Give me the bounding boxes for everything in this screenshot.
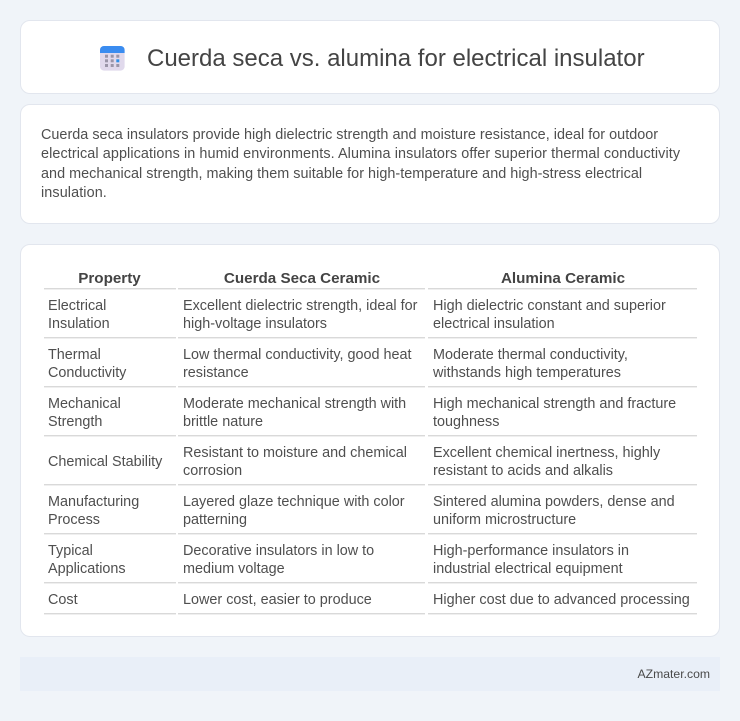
row: typical applications: medium voltage [183, 561, 285, 577]
row: thermal conductivity: Moderate thermal conductivity, [433, 347, 628, 363]
row: chemical stability: Resistant to moisture and chemical [183, 445, 407, 461]
row: typical applications: Applications [48, 561, 126, 577]
panel: intro text [20, 104, 720, 224]
row: typical applications [48, 543, 629, 577]
row: thermal conductivity: Thermal [48, 347, 101, 363]
row: cost: Lower cost, easier to produce [183, 592, 372, 608]
footer bar [20, 657, 720, 691]
row: mechanical strength: Moderate mechanical strength with [183, 396, 406, 412]
row: cost: Cost [48, 592, 78, 608]
row: chemical stability: corrosion [183, 463, 242, 479]
row: mechanical strength: Mechanical [48, 396, 121, 412]
row: manufacturing process: Layered glaze technique with color [183, 494, 405, 510]
row: cost [48, 592, 690, 608]
panel: title card [20, 20, 720, 94]
text: intro line 4: insulation. [41, 185, 107, 201]
row: mechanical strength: High mechanical strength and fracture [433, 396, 676, 412]
row: typical applications: High-performance insulators in [433, 543, 629, 559]
row: manufacturing process: Manufacturing [48, 494, 139, 510]
row: electrical insulation: Excellent dielectric strength, ideal for [183, 298, 417, 314]
row: mechanical strength: Strength [48, 414, 102, 430]
row: mechanical strength [48, 396, 676, 430]
row: manufacturing process [48, 494, 675, 528]
panel: comparison table [20, 244, 720, 637]
text: intro line 2: electrical applications in humid environments. Alumina insulators offer superior thermal conductivity [41, 146, 680, 162]
title: Cuerda seca vs. alumina for electrical insulator [147, 45, 645, 72]
row: thermal conductivity: withstands high temperatures [433, 365, 621, 381]
row: typical applications: Decorative insulators in low to [183, 543, 374, 559]
row: electrical insulation: electrical insulation [433, 316, 555, 332]
row: chemical stability: Chemical Stability [48, 454, 162, 470]
row: electrical insulation [48, 298, 666, 332]
text: intro line 1: Cuerda seca insulators provide high dielectric strength and moisture resistance, ideal for outdoor [41, 127, 658, 143]
table header [78, 270, 625, 287]
row: chemical stability [48, 445, 660, 479]
row: typical applications: industrial electrical equipment [433, 561, 623, 577]
row: thermal conductivity: Conductivity [48, 365, 126, 381]
row: electrical insulation: Electrical [48, 298, 106, 314]
row: chemical stability: Excellent chemical inertness, highly [433, 445, 660, 461]
row: mechanical strength: toughness [433, 414, 499, 430]
row: manufacturing process: Process [48, 512, 100, 528]
row: mechanical strength: brittle nature [183, 414, 263, 430]
row: electrical insulation: Insulation [48, 316, 110, 332]
row: manufacturing process: uniform microstructure [433, 512, 576, 528]
row: typical applications: Typical [48, 543, 93, 559]
icon: calendar [100, 46, 125, 71]
row: thermal conductivity [48, 347, 628, 381]
row: thermal conductivity: resistance [183, 365, 249, 381]
table header: Alumina Ceramic [501, 270, 625, 287]
table header: Property [78, 270, 141, 287]
table header: Cuerda Seca Ceramic [224, 270, 380, 287]
text: intro line 3: and mechanical strength, making them suitable for high-temperature and high-stress electrical [41, 166, 642, 182]
row: manufacturing process: Sintered alumina powders, dense and [433, 494, 675, 510]
footer text: AZmater.com [638, 667, 710, 681]
row: manufacturing process: patterning [183, 512, 247, 528]
row: electrical insulation: High dielectric constant and superior [433, 298, 666, 314]
row: thermal conductivity: Low thermal conductivity, good heat [183, 347, 412, 363]
row: chemical stability: resistant to acids and alkalis [433, 463, 613, 479]
row: electrical insulation: high-voltage insulators [183, 316, 327, 332]
row: cost: Higher cost due to advanced processing [433, 592, 690, 608]
